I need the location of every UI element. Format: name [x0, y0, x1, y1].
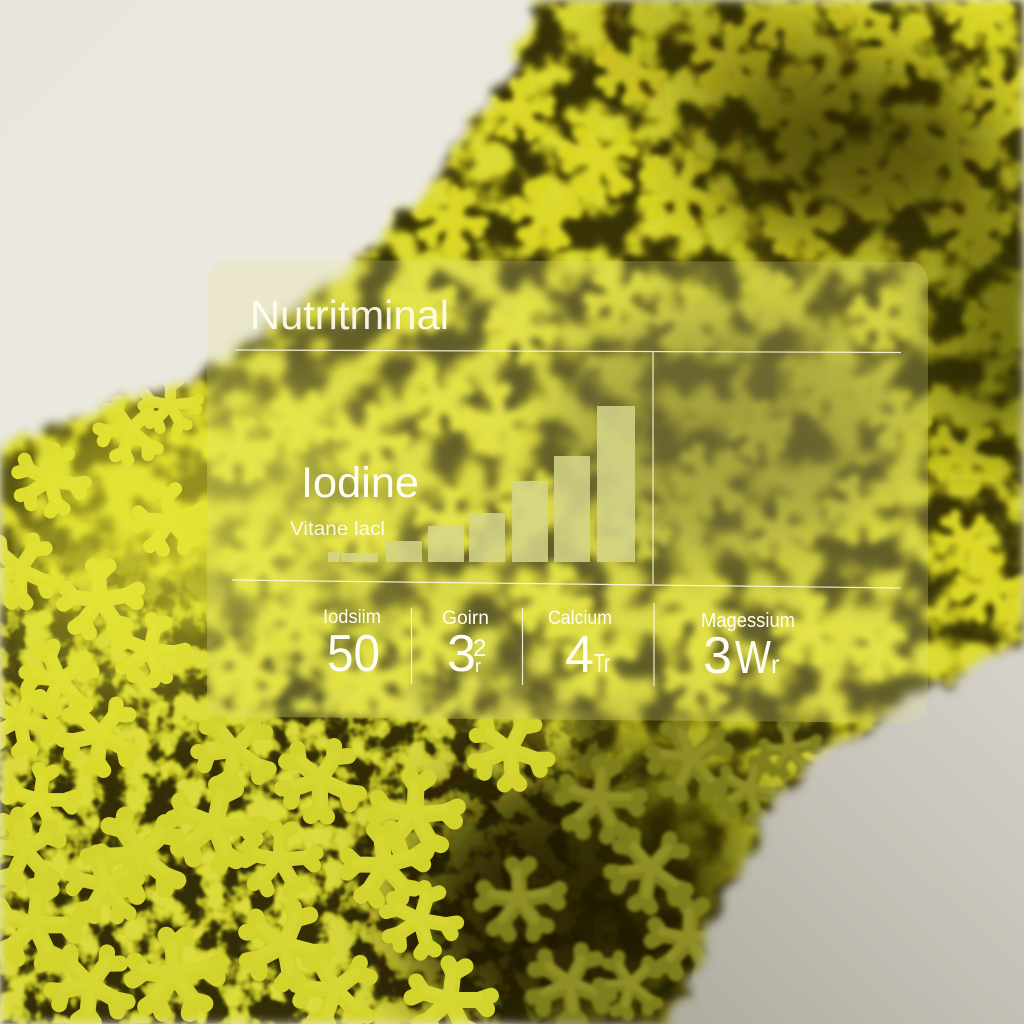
stat: Magessium 3 W: Magessium: [701, 610, 795, 632]
stat: Calcium 4: Tr: [594, 648, 610, 678]
coral, left side: [0, 373, 205, 840]
grey surface: [480, 480, 1024, 1024]
stat: Magessium 3 W: [702, 612, 794, 674]
far coral branches: [409, 0, 1024, 624]
stat: Goirn 32: [442, 610, 488, 672]
text: Vitane lacl: Vitane lacl: [290, 519, 385, 540]
dividers: [232, 350, 901, 686]
stat: Calcium 4: Calcium: [548, 608, 612, 629]
coral, sharp bottom left: [0, 700, 560, 1024]
stat: Magessium 3 W: 3: [703, 627, 732, 685]
stat: Goirn 32: r: [475, 656, 481, 676]
stat: Goirn 32: 2: [473, 635, 486, 662]
coral behind the glass panel: [203, 259, 931, 718]
stat: Goirn 32: Goirn: [442, 608, 489, 629]
bar chart: [328, 406, 635, 562]
stat: Goirn 32: 3: [447, 625, 476, 683]
seaweed band near texture: [0, 520, 659, 1024]
stat: Calcium 4: 4: [565, 626, 594, 684]
stat: Iodsiim 50: 50: [327, 625, 380, 683]
stat: Calcium 4: [548, 610, 611, 672]
panel: frosted glass nutrition card: [207, 260, 928, 723]
heading: Nutritminal: Nutritminal: [250, 292, 449, 338]
coral, bottom centre in shadow: [476, 712, 819, 1024]
text: Iodine: Iodine: [301, 459, 419, 507]
stat: Magessium 3 W: W: [735, 631, 771, 683]
stat: Iodsiim 50: [324, 609, 380, 672]
stat: Iodsiim 50: Iodsiim: [323, 607, 381, 628]
stat: Magessium 3 W: r: [771, 649, 780, 679]
